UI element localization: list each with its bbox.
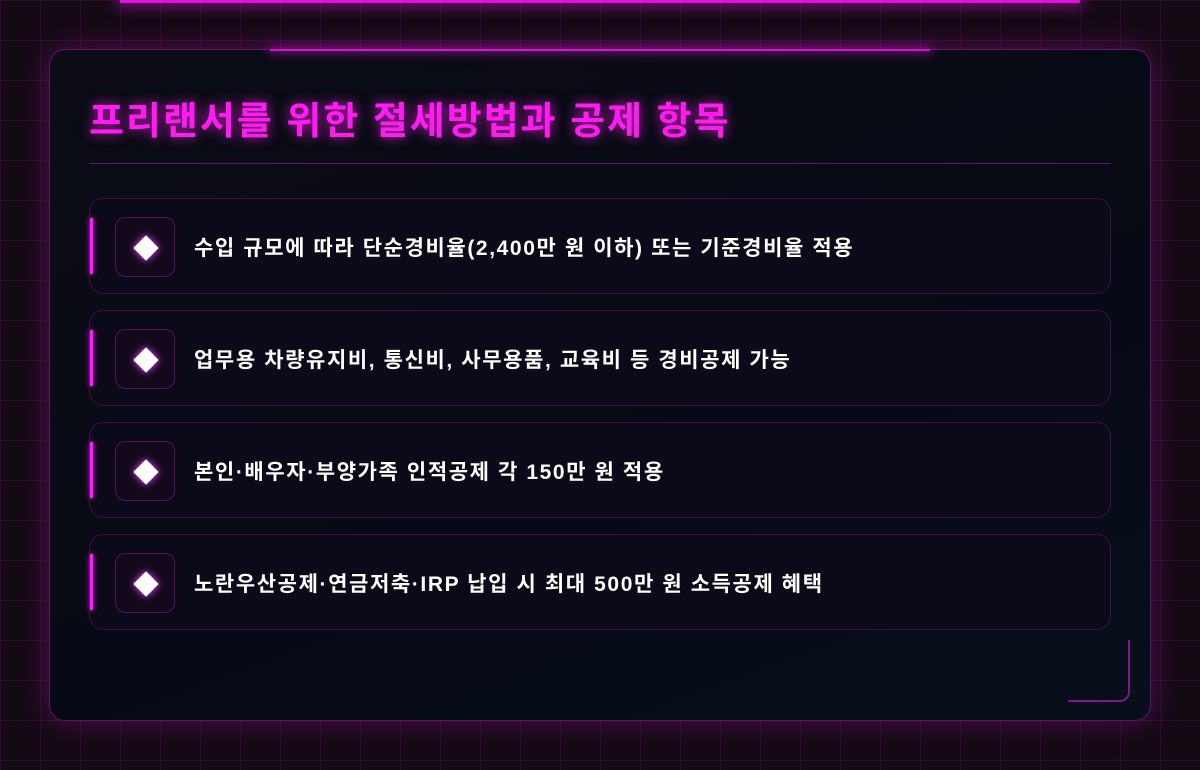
item 1 xyxy=(89,198,1111,294)
item 2 xyxy=(89,310,1111,406)
text: 수입 규모에 따라 단순경비율(2,400만 원 이하) 또는 기준경비율 적용 xyxy=(194,237,854,260)
corner accent xyxy=(1068,640,1130,702)
icon: diamond xyxy=(115,217,175,277)
text: 노란우산공제·연금저축·IRP 납입 시 최대 500만 원 소득공제 혜택 xyxy=(194,573,824,596)
title: 프리랜서를 위한 절세방법과 공제 항목 xyxy=(89,101,731,143)
icon: diamond xyxy=(115,553,175,613)
item 3 xyxy=(89,422,1111,518)
icon: diamond xyxy=(115,329,175,389)
item 4 xyxy=(89,534,1111,630)
text: 본인·배우자·부양가족 인적공제 각 150만 원 적용 xyxy=(194,461,665,484)
icon: diamond xyxy=(115,441,175,501)
text: 업무용 차량유지비, 통신비, 사무용품, 교육비 등 경비공제 가능 xyxy=(194,349,791,372)
